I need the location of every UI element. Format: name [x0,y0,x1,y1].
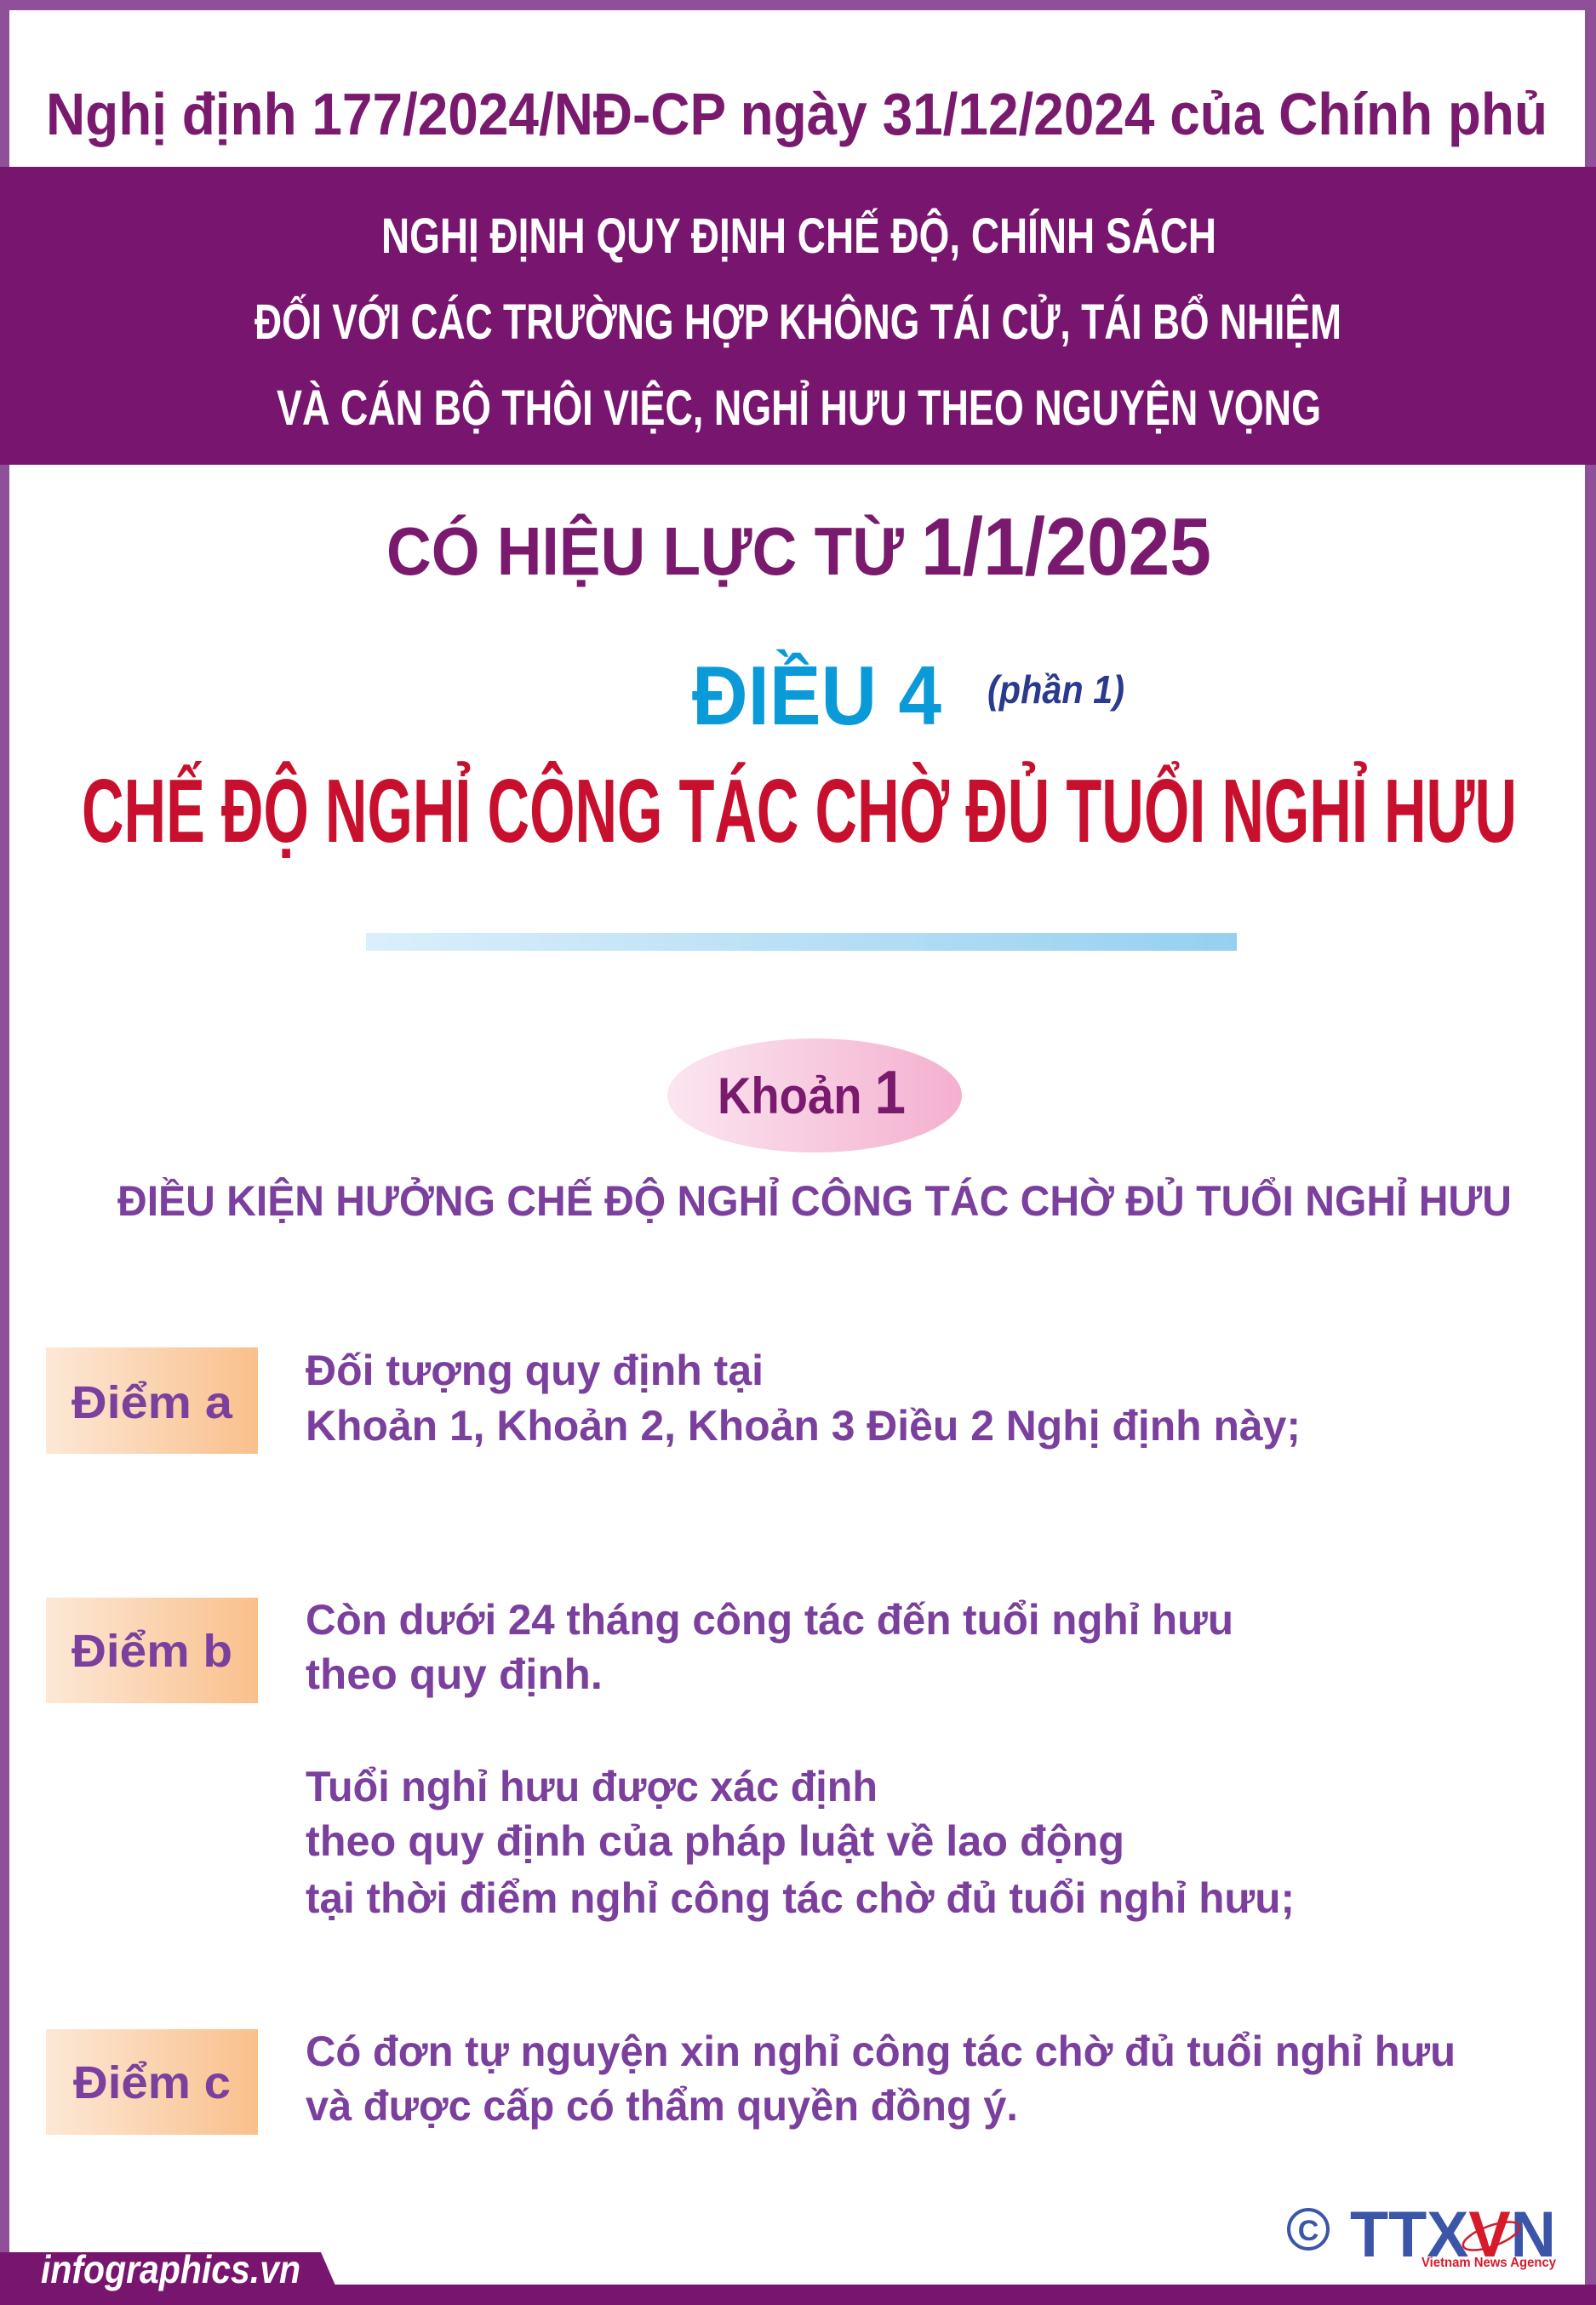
logo: TTXVN: C [1298,2215,1319,2247]
label box b [46,1598,258,1703]
Khoản 1 badge [667,1038,962,1152]
logo: TTXVN: Vietnam News Agency [1422,2256,1556,2270]
label box a [46,1347,258,1454]
point b [46,1596,1295,1922]
band heading text [255,209,1341,436]
logo: TTXVN: TTXVN [1350,2199,1556,2271]
label box b: Điểm b [72,1626,232,1677]
text a: Đối tượng quy định tại [306,1347,764,1394]
text c: và được cấp có thẩm quyền đồng ý. [306,2082,1018,2130]
part label: (phần 1) [987,667,1124,712]
point c [46,2028,1456,2135]
label box a: Điểm a [72,1377,233,1428]
text b [306,1596,1295,1922]
label box c: Điểm c [73,2057,231,2108]
band heading text: VÀ CÁN BỘ THÔI VIỆC, NGHỈ HƯU THEO NGUYỆN VỌNG [277,380,1321,436]
text b: Còn dưới 24 tháng công tác đến tuổi nghỉ hưu [306,1596,1233,1644]
text b: Tuổi nghỉ hưu được xác định [306,1763,878,1810]
label box c [46,2029,258,2135]
text a: Khoản 1, Khoản 2, Khoản 3 Điều 2 Nghị định này; [306,1402,1301,1450]
point a [46,1347,1301,1454]
effective date: CÓ HIỆU LỰC TỪ 1/1/2025 [386,501,1211,592]
text b: tại thời điểm nghỉ công tác chờ đủ tuổi nghỉ hưu; [306,1874,1295,1922]
footer bar with site tab: infographics.vn [41,2247,300,2291]
gradient divider bar [366,933,1237,951]
text c: Có đơn tự nguyện xin nghỉ công tác chờ đủ tuổi nghỉ hưu [306,2028,1456,2075]
text b: theo quy định. [306,1650,603,1698]
Khoản 1 badge: Khoản 1 [718,1059,906,1127]
band heading text: NGHỊ ĐỊNH QUY ĐỊNH CHẾ ĐỘ, CHÍNH SÁCH [381,209,1216,264]
text b: theo quy định của pháp luật về lao động [306,1817,1124,1865]
text c [306,2028,1456,2130]
text a [306,1347,1301,1450]
subheading: ĐIỀU KIỆN HƯỞNG CHẾ ĐỘ NGHỈ CÔNG TÁC CHỜ ĐỦ TUỔI NGHỈ HƯU [117,1176,1512,1225]
article heading: ĐIỀU 4 [692,649,941,742]
purple header band [0,167,1596,465]
footer bar with site tab [0,2247,1596,2305]
